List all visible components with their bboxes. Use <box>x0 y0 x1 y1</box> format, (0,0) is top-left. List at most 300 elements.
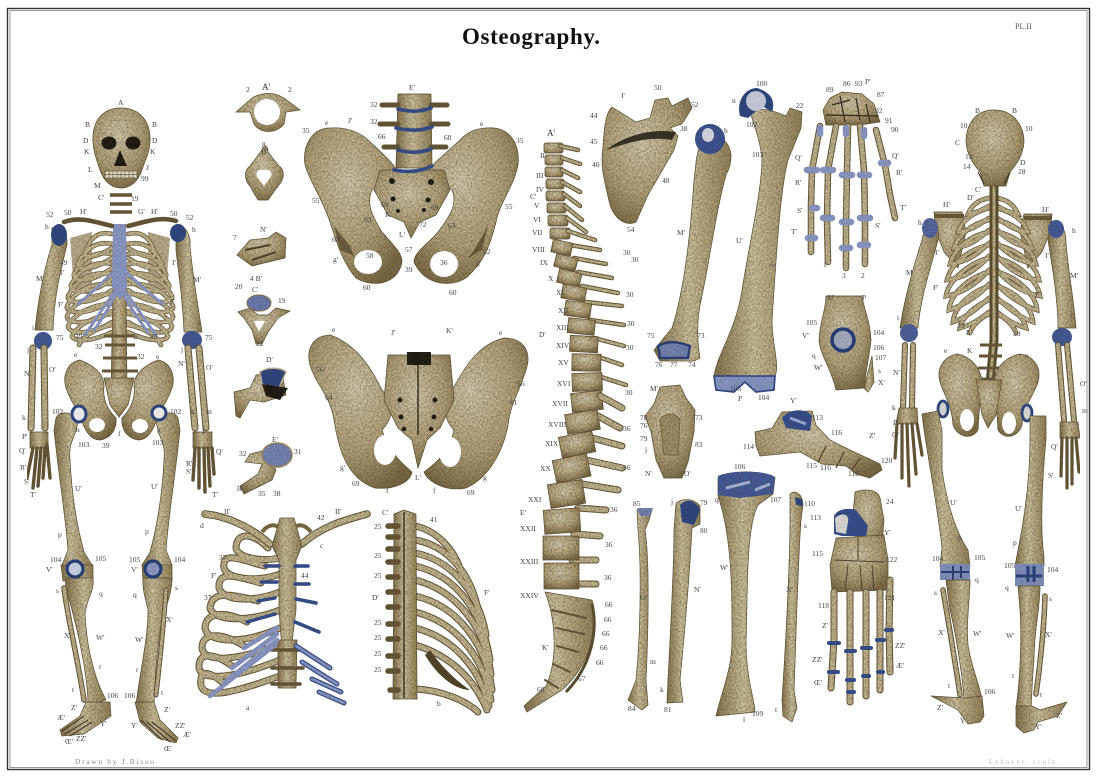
anatomical labels: 32 <box>137 352 145 361</box>
anatomical labels: 14 <box>963 162 971 171</box>
anatomical labels: 107 <box>875 353 886 362</box>
anatomical labels: W' <box>720 563 729 572</box>
anatomical labels: C' <box>530 192 537 201</box>
anatomical labels: II' <box>224 507 231 516</box>
sacral foramina <box>389 178 434 213</box>
anatomical labels: E' <box>520 508 527 517</box>
anatomical labels: 104 <box>873 328 884 337</box>
skull rear <box>966 110 1024 186</box>
anatomical labels: IV <box>536 185 544 194</box>
anatomical labels: Z' <box>937 703 944 712</box>
calcaneus <box>852 490 884 550</box>
anatomical labels: 79 <box>640 434 648 443</box>
anatomical labels: VII <box>532 228 543 237</box>
anatomical labels: E' <box>272 435 279 444</box>
anatomical labels: ZZ' <box>895 641 906 650</box>
anatomical labels: 13 <box>965 152 973 161</box>
anatomical labels: 114 <box>743 442 754 451</box>
anatomical labels: 50 <box>64 208 72 217</box>
anatomical labels: 24 <box>886 497 894 506</box>
anatomical labels: 73 <box>697 331 705 340</box>
anatomical labels: 105 <box>129 555 140 564</box>
cervical vertebrae <box>544 143 570 239</box>
anatomical labels: XXIV <box>520 591 539 600</box>
anatomical labels: L <box>88 165 93 174</box>
anatomical labels: IX <box>540 258 548 267</box>
anatomical labels: 25 <box>374 618 382 627</box>
ribs rear <box>946 198 1040 333</box>
anatomical labels: I' <box>1045 251 1049 260</box>
anatomical labels: XXII <box>520 524 536 533</box>
anatomical labels: 122 <box>886 555 898 564</box>
anatomical labels: 102 <box>746 120 758 129</box>
lower legs <box>61 561 172 705</box>
anatomical labels: 105 <box>95 554 106 563</box>
anatomical labels: T' <box>212 490 219 499</box>
anatomical labels: 66 <box>604 615 612 624</box>
arm right rear <box>1048 220 1080 488</box>
anatomical labels: q <box>99 589 103 598</box>
anatomical labels: 25 <box>374 633 382 642</box>
anatomical labels: 72 <box>419 220 427 229</box>
tibia fibula rear left <box>943 580 982 700</box>
anatomical labels: K <box>967 346 973 355</box>
anatomical labels: XX <box>540 464 551 473</box>
anatomical labels: 30 <box>631 255 639 264</box>
anatomical labels: 20 <box>235 282 243 291</box>
anatomical labels: F' <box>170 297 176 306</box>
anatomical labels: 54 <box>627 225 635 234</box>
anatomical labels: 25 <box>374 649 382 658</box>
anatomical labels: 30 <box>627 319 635 328</box>
tibia fibula rear right <box>1016 586 1045 708</box>
anatomical labels: C' <box>382 508 389 517</box>
anatomical labels: M' <box>36 274 45 283</box>
anatomical labels: C' <box>975 185 982 194</box>
anatomical labels: 104 <box>50 555 62 564</box>
anatomical labels: q <box>1005 583 1009 592</box>
anatomical labels: e <box>499 328 503 337</box>
anatomical labels: 107 <box>770 495 782 504</box>
anatomical labels: T' <box>900 203 907 212</box>
anatomical labels: e <box>156 352 160 361</box>
anatomical labels: Œ' <box>65 737 74 746</box>
anatomical labels: 103 <box>152 438 164 447</box>
anatomical labels: D' <box>967 193 974 202</box>
anatomical labels: 87 <box>877 90 885 99</box>
spine rear <box>978 175 1002 395</box>
metatarsals and toes <box>831 580 890 702</box>
engraver credit right: Lehoyer, sculp. <box>989 758 1059 766</box>
anatomical labels: D <box>1020 158 1026 167</box>
anatomical labels: 69 <box>467 488 475 497</box>
anatomical labels: P' <box>893 418 899 427</box>
anatomical labels: Æ' <box>896 661 905 670</box>
title: Osteography. <box>462 24 600 49</box>
anatomical labels: n <box>732 96 736 105</box>
anatomical labels: Q' <box>216 447 223 456</box>
anatomical labels: ZZ' <box>76 734 87 743</box>
anatomical labels: 75 <box>647 331 655 340</box>
anatomical labels: R' <box>896 168 903 177</box>
anatomical labels: 36 <box>604 573 612 582</box>
anatomical labels: p <box>1013 538 1017 547</box>
femur isolated <box>714 88 802 392</box>
anatomical labels: h <box>918 218 922 227</box>
lower spinous processes <box>570 396 622 584</box>
anatomical labels: r <box>1012 671 1015 680</box>
anatomical labels: 74 <box>688 360 696 369</box>
anatomical labels: k <box>22 413 26 422</box>
vertebra side <box>237 232 286 266</box>
anatomical labels: Y' <box>131 721 138 730</box>
anatomical labels: p <box>58 530 62 539</box>
anatomical labels: 106 <box>984 687 996 696</box>
knee joint <box>819 296 874 392</box>
lumbar vertebra oblique <box>240 443 292 494</box>
anatomical labels: 39 <box>150 332 158 341</box>
fingers <box>811 126 895 268</box>
anatomical labels: k <box>892 403 896 412</box>
anatomical labels: O' <box>640 593 647 602</box>
feet front <box>60 702 178 743</box>
anatomical labels: F' <box>58 300 64 309</box>
anatomical labels: A' <box>547 128 555 138</box>
anatomical labels: 39 <box>102 441 110 450</box>
anatomical labels: 1 <box>823 260 827 269</box>
anatomical labels: N' <box>694 585 701 594</box>
anatomical labels: S' <box>186 467 192 476</box>
anatomical labels: 2 <box>288 85 292 94</box>
anatomical labels: 76 <box>640 421 648 430</box>
anatomical labels: 115 <box>812 549 823 558</box>
anatomical labels: XIV <box>556 341 570 350</box>
anatomical labels: 63 <box>448 221 456 230</box>
anatomical labels: VIII <box>532 245 545 254</box>
anatomical labels: 22 <box>256 339 264 348</box>
anatomical labels: t <box>1040 690 1043 699</box>
anatomical labels: 104 <box>932 554 944 563</box>
anatomical labels: j <box>26 345 29 354</box>
anatomical labels: 44 <box>590 111 598 120</box>
anatomical labels: 68 <box>537 685 545 694</box>
anatomical labels: t <box>775 705 778 714</box>
anatomical labels: B <box>1012 106 1017 115</box>
anatomical labels: 37 <box>204 593 212 602</box>
elbow joint <box>645 385 695 478</box>
anatomical labels: Y' <box>884 528 891 537</box>
anatomical labels: 86 <box>843 79 851 88</box>
anatomical labels: E' <box>133 332 140 341</box>
anatomical labels: ZZ' <box>812 655 823 664</box>
vertebra transverse processes <box>102 195 138 371</box>
anatomical labels: 57 <box>405 245 413 254</box>
foot rear right <box>1016 702 1067 733</box>
femur rear right <box>1015 416 1046 566</box>
anatomical labels: 36 <box>440 258 448 267</box>
anatomical labels: g <box>483 473 487 482</box>
anatomical labels: XXI <box>528 495 542 504</box>
carpals <box>823 92 880 125</box>
anatomical labels: V <box>534 201 540 210</box>
anatomical labels: 68 <box>444 133 452 142</box>
anatomical labels: s <box>175 583 178 592</box>
anatomical labels: X' <box>938 628 945 637</box>
sacrum front <box>374 170 450 238</box>
anatomical labels: 83 <box>695 440 703 449</box>
anatomical labels: U' <box>736 236 743 245</box>
clavicles <box>64 219 176 226</box>
anatomical labels: q <box>812 351 816 360</box>
anatomical labels: 31 <box>294 447 302 456</box>
anatomical labels: m <box>650 657 656 666</box>
anatomical labels: K' <box>385 210 392 219</box>
anatomical labels: 91 <box>885 116 893 125</box>
anatomical labels: Q' <box>19 446 26 455</box>
anatomical labels: 105 <box>974 553 986 562</box>
foot rear left <box>931 696 984 724</box>
anatomical labels: h <box>1072 226 1076 235</box>
anatomical labels: h <box>192 225 196 234</box>
intervertebral discs <box>394 108 432 171</box>
anatomical labels: Z' <box>164 705 171 714</box>
anatomical labels: U' <box>75 484 82 493</box>
anatomical labels: f <box>433 486 436 495</box>
anatomical labels: 41 <box>430 515 438 524</box>
anatomical labels: 118 <box>818 601 829 610</box>
anatomical labels: j <box>670 497 673 506</box>
anatomical labels: III <box>536 171 544 180</box>
anatomical labels: Z' <box>1056 711 1063 720</box>
anatomical labels: t <box>72 685 75 694</box>
anatomical labels: Q' <box>1051 442 1058 451</box>
anatomical labels: i <box>1070 311 1072 320</box>
anatomical labels: O' <box>49 365 56 374</box>
anatomical labels: T' <box>791 227 798 236</box>
anatomical labels: W' <box>814 363 823 372</box>
transverse process knobs <box>388 526 398 690</box>
anatomical labels: j <box>180 345 183 354</box>
anatomical labels: 121 <box>884 593 896 602</box>
anatomical labels: 104 <box>174 555 186 564</box>
anatomical labels: D' <box>266 355 273 364</box>
rear pelvic holes <box>374 435 461 467</box>
anatomical labels: C' <box>252 285 259 294</box>
anatomical labels: i <box>198 318 200 327</box>
anatomical labels: H' <box>151 207 158 216</box>
anatomical labels: XIX <box>545 439 559 448</box>
anatomical labels: 45 <box>590 137 598 146</box>
anatomical labels: F' <box>933 283 939 292</box>
anatomical labels: K' <box>446 326 453 335</box>
anatomical labels: 38 <box>273 489 281 498</box>
anatomical labels: 90 <box>891 125 899 134</box>
anatomical labels: F' <box>1035 290 1041 299</box>
anatomical labels: H' <box>80 207 87 216</box>
thoracic cage rear <box>388 510 492 712</box>
anatomical labels: K <box>84 147 90 156</box>
anatomical labels: p <box>958 533 962 542</box>
anatomical labels: J' <box>348 116 353 125</box>
anatomical labels: 103 <box>78 440 90 449</box>
anatomical labels: 56 <box>517 379 525 388</box>
lumbar spine <box>396 94 432 168</box>
anatomical labels: Æ' <box>183 730 192 739</box>
anatomical labels: N' <box>178 359 185 368</box>
anatomical labels: 36 <box>236 484 244 493</box>
sacral foramina rear <box>398 398 438 431</box>
anatomical labels: A <box>118 98 124 107</box>
anatomical labels: 48 <box>662 176 670 185</box>
anatomical labels: 103 <box>752 150 764 159</box>
anatomical labels: e <box>944 346 948 355</box>
anatomical labels: 84 <box>628 704 636 713</box>
anatomical labels: 106 <box>107 691 118 700</box>
anatomical labels: K <box>150 147 156 156</box>
anatomical labels: 35 <box>516 136 524 145</box>
anatomical labels: X' <box>1045 630 1052 639</box>
sternum and thoracic spine <box>272 518 302 650</box>
anatomical labels: O' <box>684 469 691 478</box>
obturator holes <box>354 250 458 277</box>
anatomical labels: 110 <box>804 499 815 508</box>
anatomical labels: f <box>386 486 389 495</box>
anatomical labels: 67 <box>332 235 340 244</box>
anatomical labels: M' <box>1070 271 1079 280</box>
anatomical labels: U' <box>1015 504 1022 513</box>
tibia isolated <box>716 472 775 716</box>
anatomical labels: 25 <box>374 571 382 580</box>
anatomical labels: U' <box>151 482 158 491</box>
anatomical labels: 69 <box>381 200 389 209</box>
skull front <box>93 108 150 188</box>
anatomical labels: 3 <box>842 271 846 280</box>
anatomical labels: 36 <box>623 463 631 472</box>
anatomical labels: XVI <box>557 379 571 388</box>
anatomical labels: i <box>32 323 34 332</box>
ulna <box>667 500 700 703</box>
sternum and cartilage <box>78 224 163 335</box>
anatomical labels: 67 <box>578 674 586 683</box>
anatomical labels: G' <box>138 207 145 216</box>
anatomical labels: Z' <box>71 703 78 712</box>
anatomical labels: 36 <box>623 424 631 433</box>
pelvis rear large <box>309 335 528 489</box>
rear spine <box>393 510 417 699</box>
anatomical labels: e <box>1025 351 1029 360</box>
anatomical labels: 58 <box>366 251 374 260</box>
anatomical labels: A' <box>262 82 270 92</box>
anatomical labels: Y' <box>1035 722 1042 731</box>
anatomical labels: 39 <box>1013 329 1021 338</box>
anatomical labels: s <box>878 366 881 375</box>
anatomical labels: l <box>688 451 690 460</box>
anatomical labels: C' <box>98 193 105 202</box>
pelvis rear small <box>938 354 1039 436</box>
anatomical labels: 113 <box>810 513 821 522</box>
anatomical labels: 30 <box>626 290 634 299</box>
anatomical labels: 30 <box>623 248 631 257</box>
anatomical labels: Æ' <box>57 713 66 722</box>
anatomical labels: e <box>325 118 329 127</box>
anatomical labels: Z' <box>822 621 829 630</box>
anatomical labels: 60 <box>363 283 371 292</box>
anatomical labels: 39 <box>75 332 83 341</box>
anatomical labels: 113 <box>812 413 823 422</box>
anatomical labels: S' <box>797 206 803 215</box>
anatomical labels: 106 <box>873 343 884 352</box>
anatomical labels: I' <box>60 268 64 277</box>
anatomical labels: L' <box>415 473 422 482</box>
anatomical labels: 102 <box>52 407 64 416</box>
anatomical labels: 118 <box>848 469 859 478</box>
anatomical labels: 2 <box>246 85 250 94</box>
anatomical labels: 105 <box>1004 561 1016 570</box>
arm bones right <box>170 224 214 492</box>
anatomical labels: 49 <box>60 258 68 267</box>
anatomical labels: B <box>975 106 980 115</box>
anatomical labels: 63 <box>364 215 372 224</box>
anatomical labels: c <box>320 541 324 550</box>
anatomical labels: J <box>146 163 149 172</box>
anatomical labels: I' <box>172 258 176 267</box>
anatomical labels: P' <box>865 77 871 86</box>
anatomical labels: I' <box>202 427 206 436</box>
anatomical labels: N' <box>260 225 267 234</box>
anatomical labels: 7 <box>233 233 237 242</box>
anatomical labels: g' <box>333 255 339 264</box>
anatomical labels: 32 <box>239 449 247 458</box>
anatomical labels: V' <box>131 565 138 574</box>
anatomical labels: b <box>437 699 441 708</box>
anatomical labels: R' <box>20 463 27 472</box>
anatomical labels: 115 <box>806 461 817 470</box>
anatomical labels: 61 <box>510 398 518 407</box>
anatomical labels: q <box>133 590 137 599</box>
anatomical labels: 116 <box>831 428 842 437</box>
anatomical labels: d <box>200 521 204 530</box>
anatomical labels: s <box>1049 594 1052 603</box>
anatomical labels: X' <box>64 631 71 640</box>
anatomical labels: g <box>157 425 161 434</box>
anatomical labels: ZZ' <box>175 721 186 730</box>
anatomical labels: 52 <box>46 210 54 219</box>
anatomical labels: 62 <box>483 247 491 256</box>
anatomical labels: 93 <box>855 79 863 88</box>
anatomical labels: 52 <box>691 100 699 109</box>
anatomical labels: i <box>699 295 701 304</box>
anatomical labels: 32 <box>95 342 103 351</box>
anatomical labels: 64 <box>325 393 333 402</box>
foot side view <box>755 410 882 478</box>
anatomical labels: M' <box>193 275 202 284</box>
anatomical labels: N' <box>645 469 652 478</box>
anatomical labels: q <box>715 495 719 504</box>
anatomical labels: 10 <box>960 121 968 130</box>
anatomical labels: 69 <box>352 479 360 488</box>
arm left rear <box>895 218 938 486</box>
anatomical labels: 66 <box>600 643 608 652</box>
anatomical labels: V' <box>46 565 53 574</box>
anatomical labels: Z' <box>869 431 876 440</box>
anatomical labels: 73 <box>695 413 703 422</box>
anatomical labels: C <box>955 138 960 147</box>
knee blue bands <box>940 564 1044 586</box>
anatomical labels: s <box>56 586 59 595</box>
anatomical labels: R' <box>795 178 802 187</box>
anatomical labels: N' <box>893 368 900 377</box>
anatomical labels: S' <box>24 477 30 486</box>
